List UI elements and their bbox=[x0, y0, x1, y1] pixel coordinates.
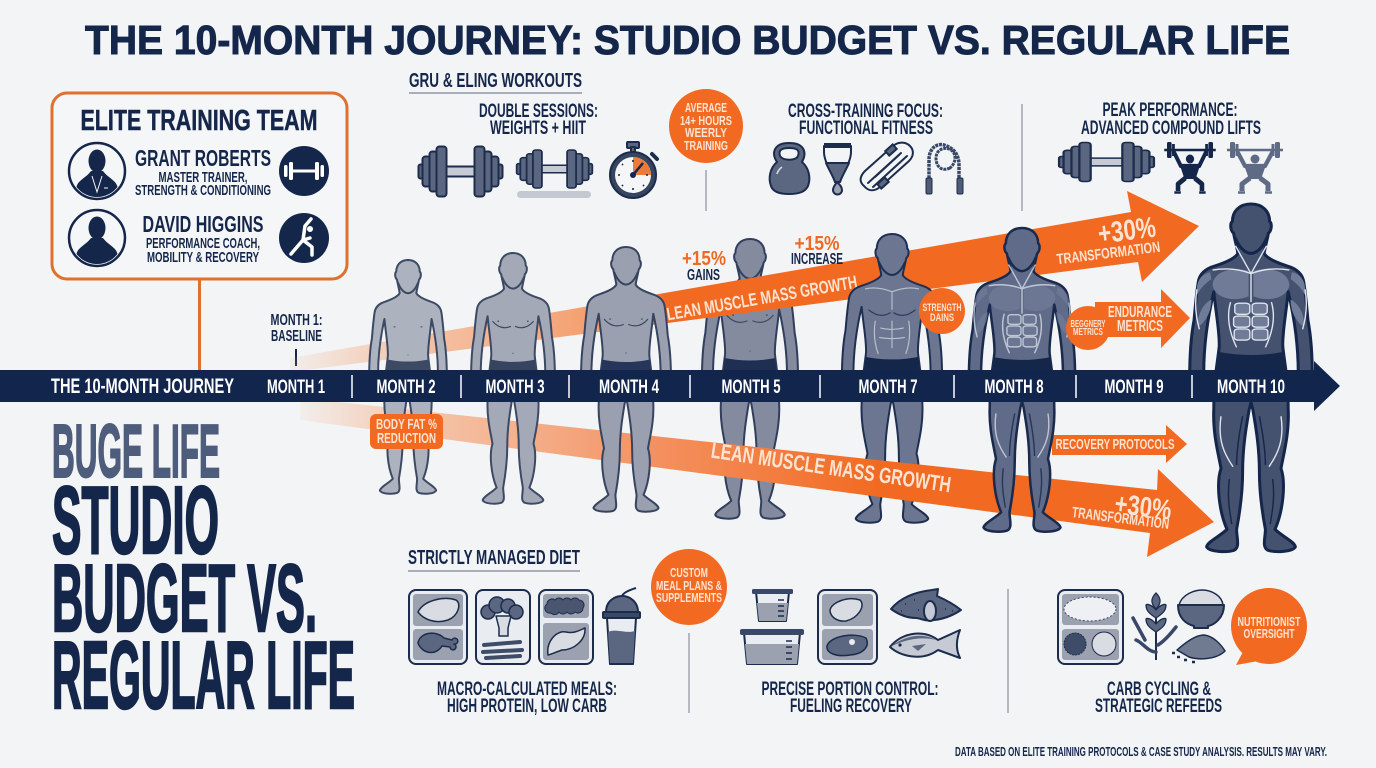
callout: weekly training hours bbox=[669, 89, 743, 163]
callout: custom meal plans: SUPPLEMENTS bbox=[656, 590, 722, 605]
icon: barbell bbox=[1059, 142, 1154, 182]
figure: month 8 bbox=[969, 228, 1075, 532]
arrow: upper lean muscle mass growth bbox=[290, 191, 1199, 372]
figure: month 4 bbox=[581, 247, 671, 512]
icon: small container bbox=[752, 589, 793, 621]
icon: stretching badge bbox=[279, 213, 329, 263]
callout: weekly training hours: WEERLY bbox=[685, 125, 727, 140]
name and role: Grant Roberts bbox=[135, 145, 271, 199]
section heading: workouts: GRU & ELING WORKOUTS bbox=[409, 70, 582, 92]
arrow: endurance metrics bbox=[1066, 289, 1190, 350]
label: lower transformation: +30% bbox=[1113, 488, 1173, 525]
label: +15% gains bbox=[682, 248, 726, 284]
icon: protein shaker bbox=[603, 588, 640, 664]
month labels: MONTH 3 bbox=[486, 377, 544, 398]
icon: grey lifter bbox=[1227, 142, 1283, 192]
arrow: recovery protocols bbox=[1052, 425, 1187, 463]
callout: strength gains bbox=[919, 288, 965, 334]
caption: peak performance bbox=[1081, 100, 1261, 139]
icon: meal tray protein bbox=[818, 590, 877, 664]
callout: weekly training hours: TRAINING bbox=[684, 138, 728, 153]
figure: month 7 bbox=[842, 234, 942, 523]
caption: double sessions: DOUBLE SESSIONS: bbox=[479, 101, 598, 122]
figure: month 2 bbox=[369, 260, 447, 494]
icon: sweet potato bbox=[891, 589, 961, 621]
label: lower transformation: TRANSFORMATION bbox=[1071, 504, 1170, 533]
figure: month 5 bbox=[702, 239, 798, 519]
name and role: Grant Roberts: STRENGTH & CONDITIONING bbox=[135, 182, 271, 199]
label: upper transformation bbox=[1056, 212, 1161, 268]
month labels: MONTH 5 bbox=[722, 377, 781, 398]
name and role: David Higgins: MOBILITY & RECOVERY bbox=[147, 249, 259, 266]
title: THE 10-MONTH JOURNEY: STUDIO BUDGET VS. REGULAR LIFE bbox=[85, 17, 1290, 63]
arrow: lower lean muscle mass growth bbox=[300, 398, 1214, 557]
label: +15% increase: INCREASE bbox=[791, 251, 843, 268]
heading: left big text bbox=[52, 409, 355, 729]
callout: body fat reduction: BODY FAT % bbox=[376, 417, 437, 433]
heading: left big text: BUGE LIFE bbox=[52, 409, 220, 493]
caption: peak performance: ADVANCED COMPOUND LIFTS bbox=[1081, 118, 1261, 139]
icon: fish bbox=[890, 630, 960, 658]
arrow: lower lean muscle mass growth: LEAN MUSCLE MASS GROWTH bbox=[710, 438, 953, 497]
arrow: recovery protocols: RECOVERY PROTOCOLS bbox=[1056, 437, 1175, 453]
icon: meal tray greens and chicken bbox=[539, 590, 593, 664]
icon: meal tray chicken bbox=[409, 590, 467, 664]
text: REGULAR LIFE bbox=[52, 622, 355, 729]
figure: month 10 bbox=[1190, 204, 1312, 552]
callout: weekly training hours: AVERAGE bbox=[685, 100, 727, 115]
callout: recovery metrics: METRICS bbox=[1073, 327, 1103, 338]
month labels: MONTH 2 bbox=[376, 377, 436, 398]
avatar: David Higgins bbox=[69, 210, 125, 266]
icon: navy lifter bbox=[1164, 142, 1216, 192]
icon: resistance band handle bbox=[824, 143, 851, 194]
caption: cross-training focus: FUNCTIONAL FITNESS bbox=[799, 118, 933, 139]
icon: resistance band loop bbox=[861, 143, 913, 190]
month labels: MONTH 10 bbox=[1217, 377, 1285, 398]
caption: carb cycling bbox=[1095, 679, 1222, 717]
timeline label: THE 10-MONTH JOURNEY bbox=[51, 374, 234, 398]
icon: large dumbbell bbox=[418, 146, 502, 196]
callout: custom meal plans: CUSTOM bbox=[670, 565, 708, 580]
icon: stopwatch bbox=[610, 142, 657, 198]
name and role: David Higgins: DAVID HIGGINS bbox=[142, 211, 264, 237]
callout: weekly training hours: 14+ HOURS bbox=[680, 113, 732, 128]
heading: left big text: STUDIO bbox=[52, 467, 219, 574]
label: +15% increase bbox=[791, 233, 843, 268]
month labels: MONTH 1 bbox=[267, 377, 325, 398]
arrow: upper lean muscle mass growth: LEAN MUSCLE MASS GROWTH bbox=[665, 272, 859, 324]
name and role: Grant Roberts: GRANT ROBERTS bbox=[135, 145, 271, 171]
icon: meal tray carbs bbox=[1058, 590, 1123, 664]
caption: double sessions bbox=[479, 101, 598, 139]
callout: recovery metrics: BEGGNERY bbox=[1070, 319, 1106, 330]
avatar: Grant Roberts bbox=[69, 143, 125, 199]
icon: grain pile bbox=[1172, 635, 1225, 662]
icon: kettlebell bbox=[770, 143, 809, 194]
callout: body fat reduction: REDUCTION bbox=[377, 431, 436, 447]
caption: portion control bbox=[762, 679, 938, 717]
month labels bbox=[267, 377, 1285, 398]
caption: portion control: FUELING RECOVERY bbox=[790, 696, 912, 717]
label: +15% gains: GAINS bbox=[687, 267, 720, 284]
caption: macro-calculated meals: MACRO-CALCULATED MEALS: bbox=[437, 679, 617, 700]
arrow: endurance metrics: METRICS bbox=[1117, 318, 1163, 335]
caption: macro-calculated meals bbox=[437, 679, 617, 717]
callout: strength gains: STRENGTH bbox=[922, 302, 962, 314]
icon: rice bowl bbox=[1178, 590, 1224, 628]
callout: nutritionist oversight: OVERSIGHT bbox=[1244, 626, 1295, 641]
label: month 1 baseline: BASELINE bbox=[271, 328, 322, 345]
month labels: MONTH 4 bbox=[599, 377, 659, 398]
label: upper transformation: TRANSFORMATION bbox=[1056, 239, 1161, 268]
label: lower transformation bbox=[1071, 488, 1173, 533]
name and role: David Higgins: PERFORMANCE COACH, bbox=[146, 235, 260, 252]
panel heading: ELITE TRAINING TEAM bbox=[80, 105, 318, 137]
label: +15% gains: +15% bbox=[682, 248, 726, 270]
label: upper transformation: +30% bbox=[1096, 212, 1158, 250]
section heading: diet: STRICTLY MANAGED DIET bbox=[408, 547, 580, 569]
month labels: MONTH 9 bbox=[1104, 377, 1164, 398]
icon: jump rope bbox=[926, 145, 963, 194]
figure: month 3 bbox=[471, 253, 555, 504]
callout: custom meal plans bbox=[651, 549, 727, 625]
name and role: Grant Roberts: MASTER TRAINER, bbox=[158, 169, 248, 186]
callout: body fat reduction bbox=[370, 414, 443, 449]
icon: dumbbell badge bbox=[279, 146, 329, 196]
callout: nutritionist oversight bbox=[1231, 588, 1307, 665]
callout: nutritionist oversight: NUTRITIONIST bbox=[1238, 614, 1301, 629]
caption: double sessions: WEIGHTS + HIIT bbox=[490, 118, 586, 139]
callout: strength gains: DAINS bbox=[930, 312, 954, 324]
connector: team panel to timeline bbox=[198, 280, 201, 372]
icon: large container bbox=[740, 629, 804, 664]
callout: custom meal plans: MEAL PLANS & bbox=[656, 578, 722, 593]
name and role: David Higgins bbox=[142, 211, 264, 266]
caption: carb cycling: STRATEGIC REFEEDS bbox=[1095, 696, 1222, 717]
label: month 1 baseline bbox=[270, 312, 322, 366]
month labels: MONTH 8 bbox=[984, 377, 1044, 398]
label: +15% increase: +15% bbox=[794, 233, 840, 255]
label: month 1 baseline: MONTH 1: bbox=[270, 312, 322, 329]
caption: carb cycling: CARB CYCLING & bbox=[1107, 679, 1211, 700]
caption: cross-training focus: CROSS-TRAINING FOCUS: bbox=[788, 101, 943, 122]
callout: recovery metrics bbox=[1066, 306, 1110, 350]
caption: portion control: PRECISE PORTION CONTROL: bbox=[762, 679, 938, 700]
icon: meal tray broccoli bbox=[476, 590, 530, 664]
arrow: endurance metrics: ENDURANCE bbox=[1108, 304, 1172, 321]
heading: left big text: BUDGET VS. bbox=[52, 545, 317, 652]
panel: elite training team bbox=[52, 93, 347, 279]
timeline bar bbox=[0, 361, 1340, 411]
caption: peak performance: PEAK PERFORMANCE: bbox=[1102, 100, 1238, 121]
month labels: MONTH 7 bbox=[858, 377, 918, 398]
caption: macro-calculated meals: HIGH PROTEIN, LOW CARB bbox=[447, 696, 607, 717]
caption: cross-training focus bbox=[788, 101, 943, 139]
icon: wheat bbox=[1133, 593, 1176, 660]
icon: small dumbbell with shadow bbox=[517, 150, 592, 198]
